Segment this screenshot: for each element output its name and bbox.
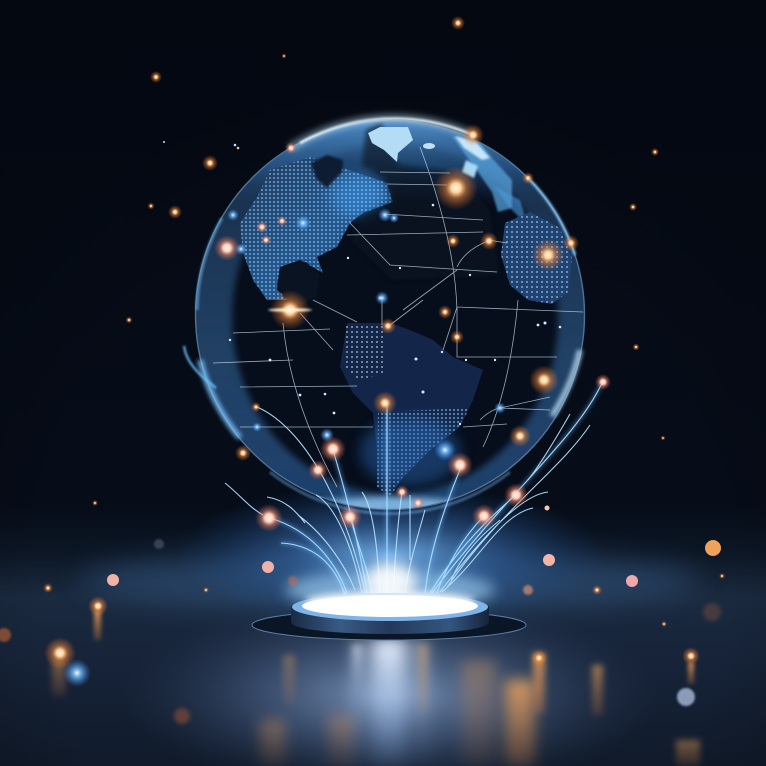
base pedestal (252, 591, 526, 640)
continent: Africa (501, 212, 572, 304)
fiber optic strands (225, 383, 602, 595)
fiber glow (270, 383, 602, 595)
lit lower globe glow (360, 418, 460, 486)
Atlantic shadow (360, 122, 456, 222)
globe sphere (195, 120, 585, 510)
pedestal cylinder (291, 606, 489, 634)
Gulf of Mexico (277, 262, 310, 300)
base glow (285, 562, 495, 610)
continent: Greenland (368, 127, 435, 162)
pedestal light disc (292, 593, 488, 621)
small blue stars (229, 204, 561, 425)
continent: Europe (452, 135, 526, 218)
globe rim highlights (196, 118, 584, 514)
fiber lines (225, 383, 602, 595)
glowing network nodes (214, 124, 638, 587)
continent: South America (340, 323, 483, 497)
globe (184, 115, 590, 515)
glass crescent (190, 115, 590, 515)
floor reflections (52, 610, 700, 766)
pedestal outer ring (252, 610, 526, 640)
polar cap light (240, 121, 538, 198)
continent: North America (240, 155, 393, 306)
Hudson Bay (311, 155, 343, 188)
left blue streak (184, 346, 216, 388)
network routes (213, 147, 583, 487)
